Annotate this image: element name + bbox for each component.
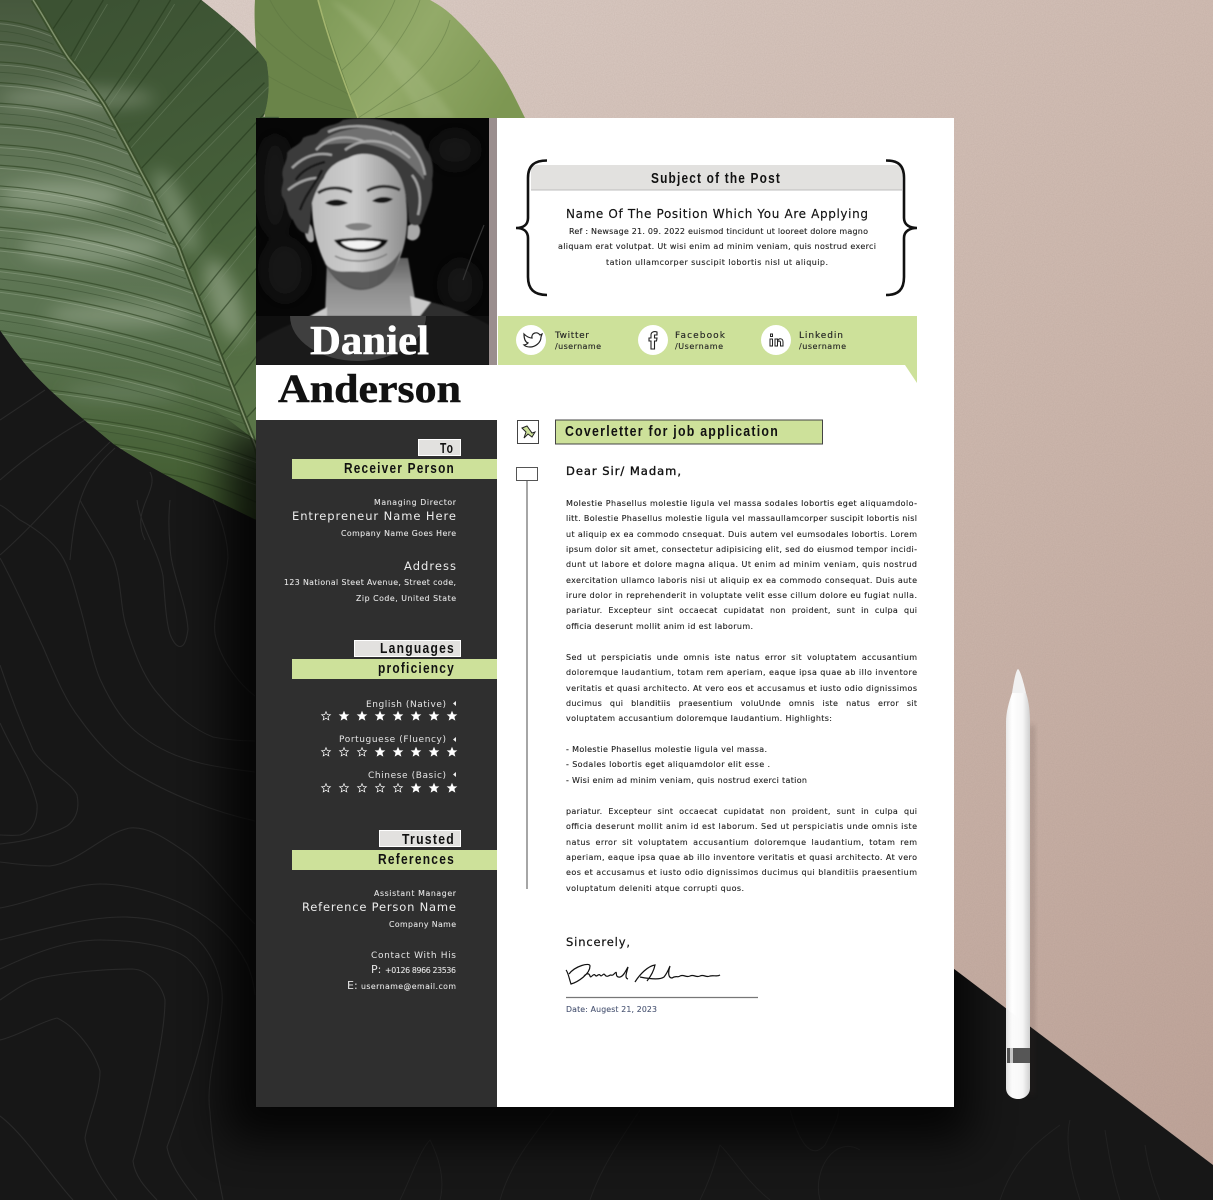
reference contact: Contact With His	[371, 951, 456, 961]
letter paragraph 1: dunt ut labore et dolore magna aliqua. Ut enim ad minim veniam, quis nostrud	[566, 560, 917, 569]
heading: coverletter for job application	[556, 420, 822, 444]
letter paragraph 2: Sed ut perspiciatis unde omnis iste natus error sit voluptatem accusantium	[566, 653, 917, 662]
paper shadow on surface	[225, 430, 970, 1140]
facebook handle: Facebook	[675, 331, 726, 341]
receiver address: Address	[404, 559, 456, 573]
reference details: Company Name	[389, 920, 456, 929]
reference text	[558, 227, 876, 267]
panel: social links band	[498, 316, 917, 383]
name: Anderson: Anderson	[278, 366, 461, 411]
language: English rating	[322, 700, 456, 720]
date: Date: Augest 21, 2023	[566, 1005, 657, 1014]
salutation: Dear Sir/ Madam,	[566, 464, 681, 478]
facebook handle: /Username	[675, 342, 723, 351]
language: English rating: English (Native)	[366, 700, 446, 710]
reference text: tation ullamcorper suscipit lobortis nisl ut aliquip.	[606, 258, 828, 267]
left brace	[516, 160, 547, 295]
letter paragraph 1: irure dolor in reprehenderit in voluptate velit esse cillum dolore eu fugiat nulla.	[566, 591, 917, 600]
language: Portuguese rating: Portuguese (Fluency)	[339, 735, 446, 745]
letter paragraph 1: litt. Bolestie Phasellus molestie ligula vel massaullamcorper suscipit lobortis nisl	[566, 514, 917, 523]
letter paragraph 3: aperiam, eaque ipsa quae ab illo inventore veritatis et quasi architecto. At vero	[566, 853, 917, 862]
twitter handle: Twitter	[554, 331, 589, 341]
letter paragraph 3	[566, 807, 917, 893]
letter paragraph 2: doloremque laudantium, totam rem aperiam, eaque ipsa quae ab illo inventore	[566, 668, 917, 677]
leaf: small rear leaf	[255, 0, 525, 118]
letter paragraph 1: exercitation ullamco laboris nisi ut aliquip ex ea commodo consequat. Duis aute	[566, 576, 917, 585]
letter paragraph 2	[566, 653, 917, 723]
closing: Sincerely: Sincerely,	[566, 935, 630, 949]
portrait figure	[256, 118, 489, 365]
name: Daniel: Daniel	[310, 317, 429, 363]
collar	[310, 296, 431, 316]
linkedin handle: /username	[799, 342, 846, 351]
icon: linkedin	[761, 325, 791, 355]
linkedin handle	[799, 331, 846, 351]
receiver details: Entrepreneur Name Here	[292, 509, 456, 523]
letter paragraph 1: Molestie Phasellus molestie ligula vel massa sodales lobortis eget aliquamdolo-	[566, 499, 917, 508]
label tab: Trusted: Trusted	[402, 832, 455, 848]
reference details: Assistant Manager	[374, 889, 457, 898]
heading bar: proficiency	[292, 659, 497, 679]
letter paragraph 1: ut aliquip ex ea commodo cnsequat. Duis autem vel eumsodales lobortis. Lorem	[566, 530, 917, 539]
highlights list: - Molestie Phasellus molestie ligula vel massa.	[566, 745, 767, 754]
label tab: To: To	[440, 441, 454, 457]
section: references	[292, 830, 497, 992]
right brace	[886, 160, 917, 295]
letter paragraph 1: officia deserunt mollit anim id est laborum.	[566, 622, 753, 631]
language: Portuguese rating	[322, 735, 456, 756]
linkedin handle: Linkedin	[799, 331, 843, 341]
reference text: Ref : Newsage 21. 09. 2022 euismod tincidunt ut looreet dolore magno	[569, 227, 868, 236]
highlights list: - Sodales lobortis eget aliquamdolor elit esse .	[566, 760, 770, 769]
twitter handle: /username	[555, 342, 601, 351]
stubble	[324, 250, 401, 290]
letter paragraph 3: eos et accusamus et iusto odio dignissimos ducimus qui blanditiis praesentium	[566, 868, 917, 877]
heading bar: References: References	[378, 852, 455, 868]
highlights list	[566, 745, 807, 785]
smile	[334, 238, 388, 252]
icon: facebook	[638, 325, 668, 355]
leaf: large front leaf	[0, 0, 279, 520]
heading bar: References	[292, 850, 497, 870]
reference contact: E:	[347, 979, 358, 992]
reference contact: +0126 8966 23536	[385, 966, 456, 975]
language: Chinese rating: Chinese (Basic)	[368, 771, 446, 781]
reference contact	[347, 951, 456, 992]
heading: coverletter for job application: Coverletter for job application	[565, 423, 779, 440]
heading bar: proficiency: proficiency	[378, 661, 455, 677]
panel: left sidebar	[256, 420, 497, 1107]
twitter handle	[554, 331, 601, 351]
reference details: Reference Person Name	[302, 900, 456, 914]
paper: resume sheet	[256, 118, 954, 1107]
label tab: Languages	[354, 640, 460, 657]
photo: portrait of Daniel	[256, 118, 489, 365]
reference details	[302, 889, 457, 929]
receiver address: Zip Code, United State	[356, 594, 456, 603]
background: black diagonal surface with contour lines	[0, 247, 1213, 1200]
letter paragraph 1	[566, 499, 917, 631]
heading bar: Receiver Person: Receiver Person	[344, 461, 455, 477]
reference contact: username@email.com	[361, 982, 456, 991]
nose	[345, 223, 372, 230]
letter paragraph 2: ducimus qui blanditiis praesentium voluUnde omnis iste natus error sit	[566, 699, 917, 708]
icon: twitter	[516, 325, 546, 355]
subject heading bar	[531, 165, 902, 190]
signature line	[566, 996, 758, 998]
panel: subject of the post	[516, 160, 917, 295]
reference text: aliquam erat volutpat. Ut wisi enim ad minim veniam, quis nostrud exerci	[558, 242, 876, 251]
accent strip beside photo	[489, 118, 497, 365]
receiver details: Managing Director	[374, 498, 457, 507]
language: Chinese rating	[322, 771, 456, 792]
hair	[281, 118, 433, 234]
brows	[318, 186, 400, 193]
letter paragraph 1: ipsum dolor sit amet, consectetur adipisicing elit, sed do eiusmod tempor incidi-	[566, 545, 917, 554]
letter paragraph 3: natus error sit voluptatem accusantium doloremque laudantium, totam rem	[566, 838, 917, 847]
icon: pin box	[518, 420, 538, 444]
letter paragraph 3: pariatur. Excepteur sint occaecat cupidatat non proident, sunt in culpa qui	[566, 807, 917, 816]
letter paragraph 2: voluptatem accusantium doloremque laudantium. Highlights:	[566, 714, 832, 723]
letter paragraph 2: veritatis et quasi architecto. At vero eos et accusamus et iusto odio dignissimos	[566, 684, 917, 693]
label tab: Trusted	[380, 830, 460, 848]
letter paragraph 3: voluptatum deleniti atque corrupti quos.	[566, 884, 744, 893]
section: receiver person	[284, 440, 497, 603]
letter paragraph 3: officia deserunt mollit anim id est laborum. Sed ut perspiciatis unde omnis iste	[566, 822, 917, 831]
subject heading: Subject of the Post	[651, 170, 781, 187]
pencil	[1006, 669, 1034, 1099]
heading bar: Receiver Person	[292, 459, 497, 479]
label tab: To	[418, 440, 460, 457]
receiver details: Company Name Goes Here	[341, 529, 456, 538]
facebook handle	[675, 331, 726, 351]
eyes	[325, 197, 393, 206]
neck	[325, 258, 418, 316]
receiver details	[292, 498, 457, 538]
ears	[305, 223, 420, 242]
highlights list: - Wisi enim ad minim veniam, quis nostrud exerci tation	[566, 776, 807, 785]
shirt	[256, 302, 489, 365]
section: languages	[292, 640, 497, 792]
signature	[566, 964, 720, 984]
receiver address	[284, 559, 456, 603]
face	[312, 153, 407, 288]
position title: Name Of The Position Which You Are Applying	[566, 207, 868, 221]
receiver address: 123 National Steet Avenue, Street code,	[284, 578, 456, 587]
reference contact: P:	[371, 963, 381, 976]
label tab: Languages: Languages	[380, 641, 455, 657]
name band	[256, 316, 489, 365]
letter paragraph 1: pariatur. Excepteur sint occaecat cupidatat non proident, sunt in culpa qui	[566, 606, 917, 615]
timeline marker	[516, 468, 538, 889]
